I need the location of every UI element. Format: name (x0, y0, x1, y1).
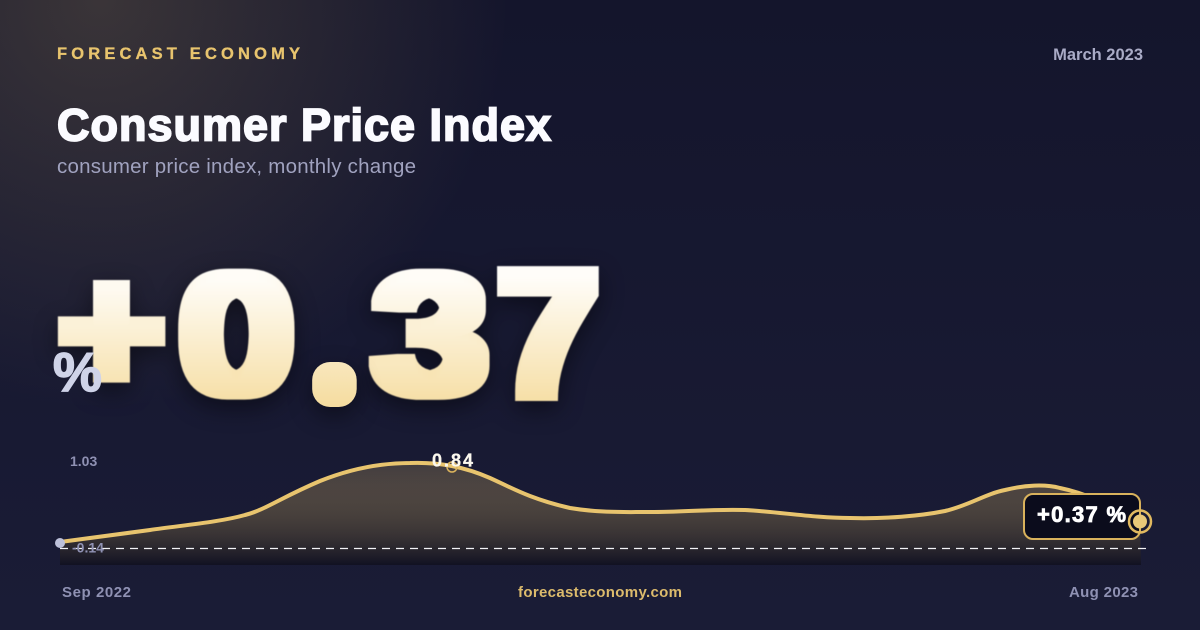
date: March 2023 (1053, 46, 1143, 64)
brand label: FORECAST ECONOMY (57, 45, 300, 63)
peak label: 0.84 (432, 450, 473, 470)
big value: + (59, 228, 164, 431)
peak marker (447, 462, 457, 472)
axis min label: -0.14 (72, 540, 104, 556)
chart line (60, 463, 1140, 542)
sparkline chart (55, 450, 1151, 565)
subtitle: consumer price index, monthly change (57, 155, 416, 178)
chart area fill (60, 463, 1141, 565)
current point marker (1129, 510, 1151, 532)
current value badge (1024, 494, 1140, 539)
axis max label: 1.03 (70, 453, 97, 469)
zero baseline (60, 548, 1146, 550)
source website: forecasteconomy.com (518, 584, 682, 601)
current value badge: +0.37 % (1037, 502, 1126, 527)
big value: 0 (178, 239, 295, 430)
title: Consumer Price Index (57, 100, 551, 150)
big value: 3 (372, 239, 489, 430)
start point (55, 538, 65, 548)
big value: . (326, 335, 343, 402)
start date label: Sep 2022 (62, 584, 131, 601)
end date label: Aug 2023 (1069, 584, 1138, 601)
big value: 7 (498, 233, 598, 435)
big value (59, 228, 598, 435)
percent unit: % (53, 341, 102, 403)
